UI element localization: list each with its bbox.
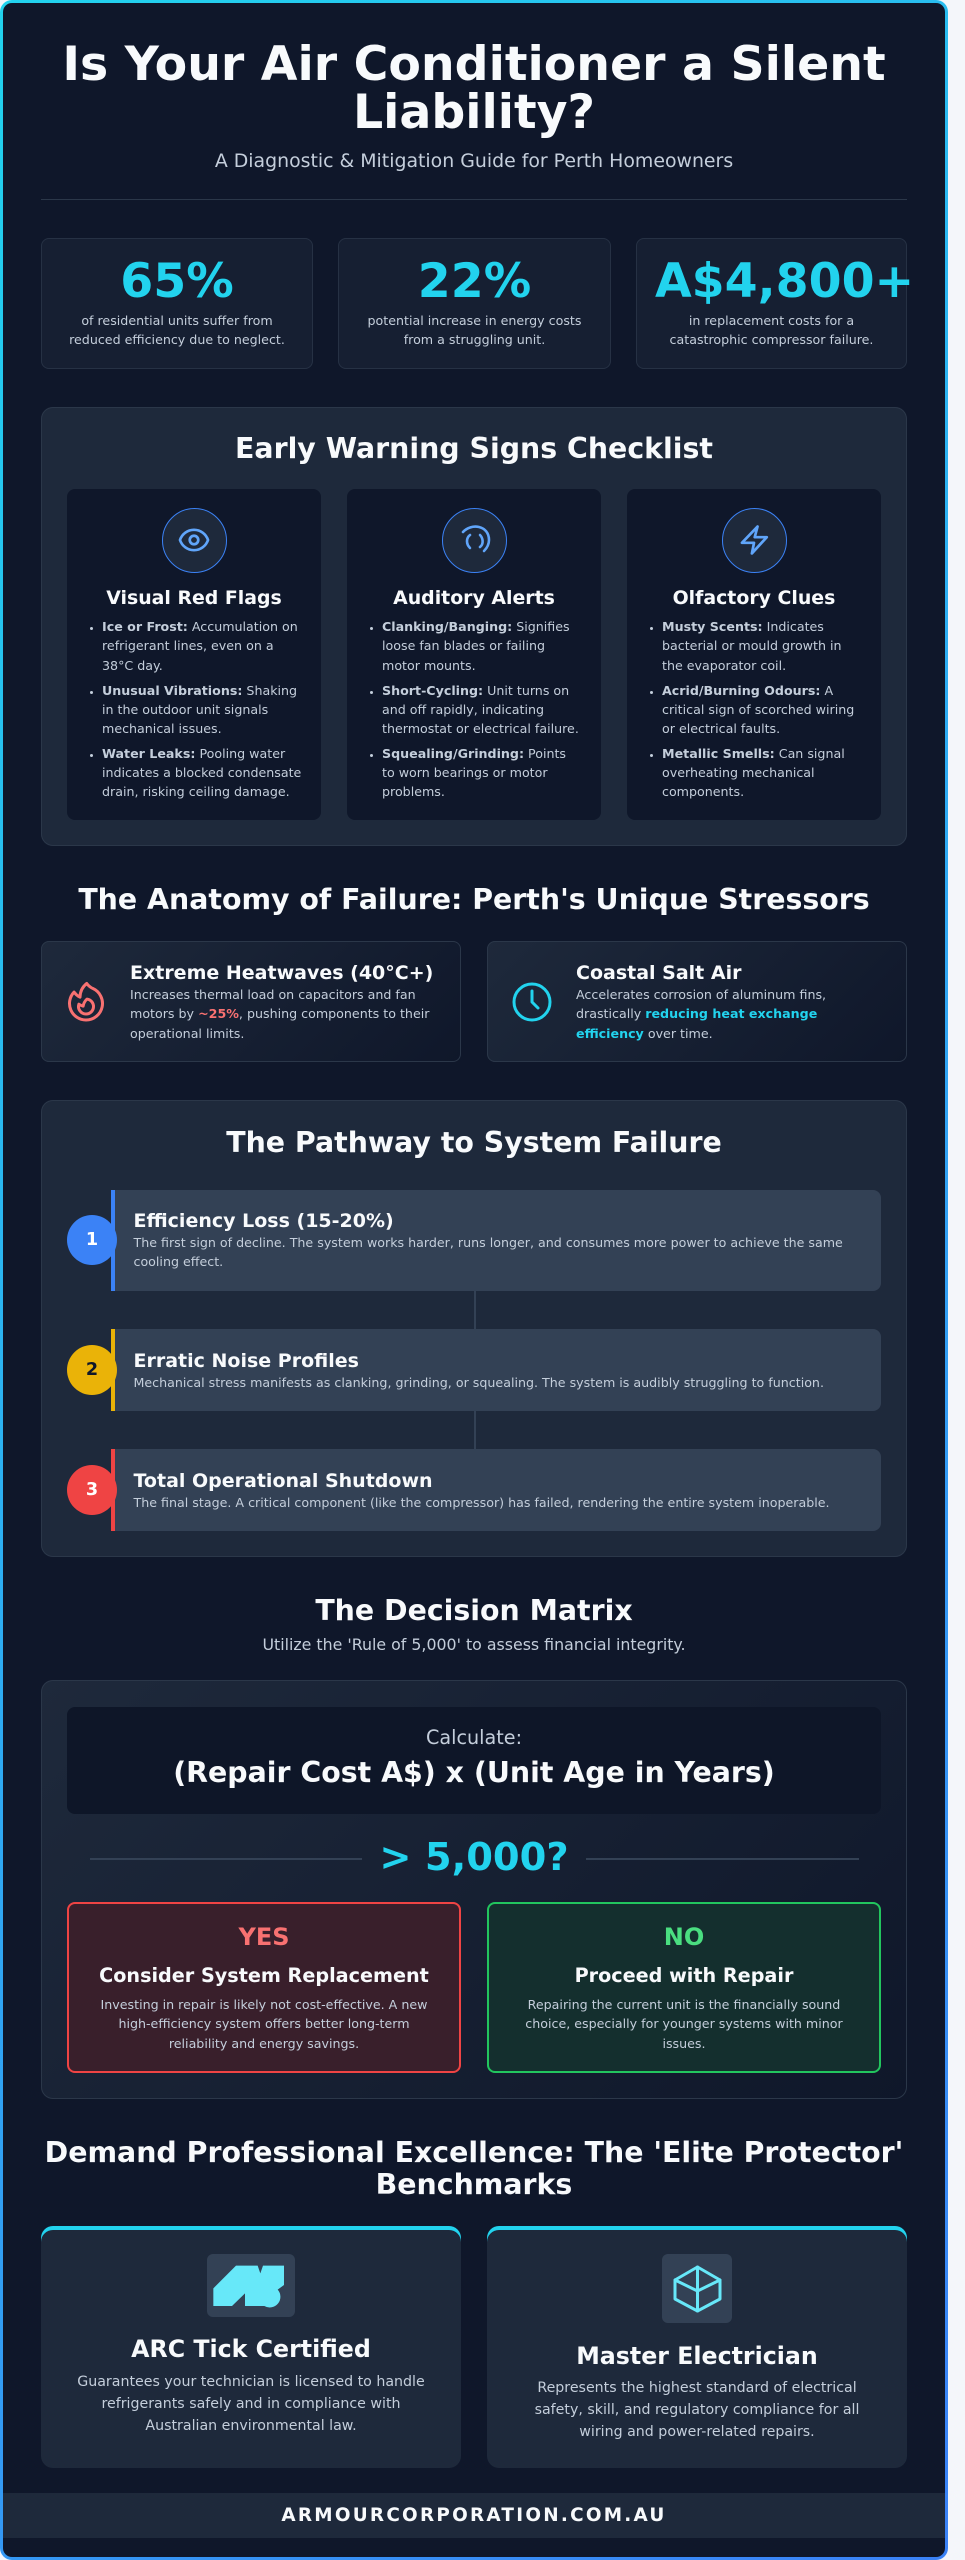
list: olfactory clues: overheating mechanical: [662, 765, 815, 780]
list: visual red flags: in the outdoor unit signals: [102, 702, 268, 717]
title: Is Your Air Conditioner a Silent: [62, 37, 886, 92]
icon: sound arcs: [442, 508, 507, 573]
step 1: efficiency loss: cooling effect.: [134, 1254, 223, 1269]
text: extreme heatwaves: Increases thermal load on capacitors and fan: [130, 987, 416, 1002]
text: ARC tick certified: Guarantees your technician is licensed to handle: [77, 2374, 425, 2390]
heading: decision matrix: The Decision Matrix: [315, 1594, 633, 1627]
step 1 badge: [67, 1215, 117, 1265]
text: extreme heatwaves: operational limits.: [130, 1026, 244, 1040]
list: auditory alerts: Short-Cycling: Unit turns on: [382, 682, 569, 698]
text: ARC tick certified: refrigerants safely and in compliance with: [101, 2396, 401, 2412]
stat card: A$4,800+: A$4,800+: [655, 254, 914, 309]
formula box: Calculate:: [426, 1726, 522, 1749]
panel: decision matrix: [41, 1680, 907, 2099]
outcome: no: issues.: [662, 2036, 706, 2050]
icon: lightning bolt: [722, 508, 787, 573]
outcome: no: Repairing the current unit is the financially sound: [528, 1997, 840, 2012]
list: olfactory clues: or electrical faults.: [662, 721, 780, 736]
panel: early warning signs checklist: [41, 407, 907, 846]
heading: pathway: The Pathway to System Failure: [226, 1126, 722, 1159]
card: ARC tick certified: [41, 2226, 461, 2468]
stat card: 22%: from a struggling unit.: [404, 332, 545, 347]
outcome: no: NO: [664, 1923, 704, 1951]
list: auditory alerts: motor mounts.: [382, 658, 476, 672]
step 1: efficiency loss: Efficiency Loss (15-20%): [134, 1210, 394, 1232]
card: master electrician: [487, 2226, 907, 2468]
list: visual red flags: Water Leaks: Pooling water: [102, 746, 285, 761]
heading: professional excellence: Benchmarks: [376, 2168, 572, 2200]
list: visual red flags: [90, 619, 301, 799]
stat card: 65%: [41, 238, 313, 369]
list: olfactory clues: the evaporator coil.: [662, 658, 786, 672]
stat card: A$4,800+: [636, 238, 907, 369]
step 1: efficiency loss: [111, 1190, 881, 1291]
outcome: yes: Investing in repair is likely not cost-effective. A new: [101, 1997, 427, 2012]
stat card: 65%: 65%: [120, 254, 234, 309]
outcome: yes: [67, 1902, 461, 2073]
text: master electrician: [535, 2380, 859, 2440]
step 3: total operational shutdown: The final stage. A critical component (like the compressor) has failed, rendering the entire system inoperable.: [134, 1495, 830, 1510]
outcome: no: Proceed with Repair: [575, 1964, 793, 1987]
list: olfactory clues: Musty Scents: Indicates: [662, 619, 824, 634]
subheading: decision matrix: Utilize the 'Rule of 5,000' to assess financial integrity.: [262, 1635, 686, 1654]
step 2: erratic noise profiles: [111, 1329, 881, 1411]
stat card: A$4,800+: catastrophic compressor failure.: [670, 332, 873, 347]
heading: checklist: Early Warning Signs Checklist: [235, 432, 713, 465]
card: olfactory clues: [627, 489, 881, 820]
formula box: (Repair Cost A$) x (Unit Age in Years): [173, 1756, 775, 1789]
list: olfactory clues: bacterial or mould growth in: [662, 638, 842, 653]
step 3: total operational shutdown: Total Operational Shutdown: [134, 1470, 433, 1492]
heading: extreme heatwaves: Extreme Heatwaves (40°C+): [130, 962, 433, 984]
list: olfactory clues: Acrid/Burning Odours: A: [662, 682, 833, 698]
icon: flame: [68, 982, 104, 1022]
icon: ARC logo: [207, 2254, 295, 2317]
list: auditory alerts: loose fan blades or failing: [382, 638, 545, 653]
text: extreme heatwaves: motors by ~25%, pushing components to their: [130, 1006, 429, 1021]
list: visual red flags: Unusual Vibrations: Shaking: [102, 682, 297, 698]
list: auditory alerts: and off rapidly, indicating: [382, 702, 544, 717]
text: coastal salt air: drastically reducing heat exchange: [576, 1006, 817, 1021]
outcome: yes: high-efficiency system offers better long-term: [118, 2016, 410, 2031]
card: auditory alerts: [347, 489, 601, 820]
list: visual red flags: Ice or Frost: Accumulation on: [102, 619, 298, 634]
icon: eye: [162, 508, 227, 573]
heading: anatomy of failure: The Anatomy of Failure: Perth's Unique Stressors: [78, 883, 870, 916]
text: master electrician: Represents the highest standard of electrical: [537, 2380, 857, 2396]
list: visual red flags: indicates a blocked condensate: [102, 765, 301, 780]
outcome: no: choice, especially for younger systems with minor: [525, 2016, 843, 2031]
text: coastal salt air: Accelerates corrosion of aluminum fins,: [576, 987, 826, 1002]
threshold: > 5,000?: [379, 1835, 569, 1880]
list: olfactory clues: Metallic Smells: Can signal: [662, 746, 845, 761]
panel: pathway to system failure: [41, 1100, 907, 1557]
list: auditory alerts: problems.: [382, 784, 445, 799]
heading: auditory alerts: Auditory Alerts: [393, 587, 555, 609]
subtitle: A Diagnostic & Mitigation Guide for Perth Homeowners: [215, 150, 733, 172]
list: visual red flags: drain, risking ceiling damage.: [102, 784, 290, 799]
heading: coastal salt air: Coastal Salt Air: [576, 962, 741, 984]
step 3 badge: [67, 1465, 117, 1515]
icon: cube: [662, 2254, 732, 2323]
stat card: A$4,800+: in replacement costs for a: [689, 313, 854, 328]
step 3: total operational shutdown: [111, 1449, 881, 1531]
text: master electrician: wiring and power-related repairs.: [579, 2424, 815, 2440]
card: coastal salt air: [487, 941, 907, 1062]
text: ARC tick certified: Australian environmental law.: [145, 2418, 357, 2434]
list: olfactory clues: [650, 619, 854, 799]
footer: [3, 2493, 945, 2538]
text: ARC tick certified: [77, 2374, 425, 2434]
outcome: yes: reliability and energy savings.: [169, 2036, 359, 2050]
outcome: yes: Consider System Replacement: [99, 1964, 429, 1987]
list: visual red flags: mechanical issues.: [102, 721, 222, 736]
list: auditory alerts: Squealing/Grinding: Points: [382, 746, 566, 761]
heading: visual red flags: Visual Red Flags: [106, 587, 282, 609]
text: coastal salt air: [576, 987, 826, 1040]
step 2: erratic noise profiles: Mechanical stress manifests as clanking, grinding, or squealing. The system is audibly struggling to function.: [134, 1375, 824, 1390]
outcome: no: [487, 1902, 881, 2073]
stat card: 65%: reduced efficiency due to neglect.: [69, 332, 285, 347]
heading: professional excellence: [45, 2136, 903, 2200]
step 2: erratic noise profiles: Erratic Noise Profiles: [134, 1350, 359, 1372]
step 1 badge: 1: [86, 1230, 98, 1250]
footer: ARMOURCORPORATION.COM.AU: [281, 2505, 667, 2526]
heading: master electrician: Master Electrician: [576, 2342, 818, 2370]
heading: olfactory clues: Olfactory Clues: [673, 587, 835, 609]
text: coastal salt air: efficiency over time.: [576, 1026, 713, 1040]
step 2 badge: 2: [86, 1360, 98, 1380]
text: master electrician: safety, skill, and regulatory compliance for all: [535, 2402, 859, 2418]
step 1: efficiency loss: The first sign of decline. The system works harder, runs longer, and consumes more power to achieve the same: [134, 1235, 843, 1250]
stat card: 22%: [338, 238, 611, 369]
title: Liability?: [353, 85, 595, 140]
list: auditory alerts: [370, 619, 579, 799]
list: visual red flags: 38°C day.: [102, 658, 163, 672]
formula box: [67, 1707, 881, 1814]
list: olfactory clues: components.: [662, 784, 744, 799]
list: auditory alerts: Clanking/Banging: Signifies: [382, 619, 570, 634]
stat card: 22%: potential increase in energy costs: [368, 313, 581, 328]
list: olfactory clues: critical sign of scorched wiring: [662, 702, 854, 717]
title: [62, 37, 886, 140]
icon: clock: [512, 982, 552, 1022]
card: extreme heatwaves: [41, 941, 461, 1062]
step 2 badge: [67, 1345, 117, 1395]
outcome: yes: YES: [238, 1923, 290, 1951]
list: auditory alerts: thermostat or electrical failure.: [382, 721, 579, 736]
list: auditory alerts: to worn bearings or motor: [382, 765, 548, 780]
heading: ARC tick certified: ARC Tick Certified: [131, 2335, 371, 2363]
stat card: 22%: 22%: [418, 254, 531, 309]
card: visual red flags: [67, 489, 321, 820]
heading: professional excellence: Demand Professional Excellence: The 'Elite Protector': [45, 2136, 903, 2169]
step 3 badge: 3: [86, 1480, 98, 1500]
list: visual red flags: refrigerant lines, even on a: [102, 638, 274, 653]
text: extreme heatwaves: [130, 987, 430, 1040]
stat card: 65%: of residential units suffer from: [81, 313, 273, 328]
